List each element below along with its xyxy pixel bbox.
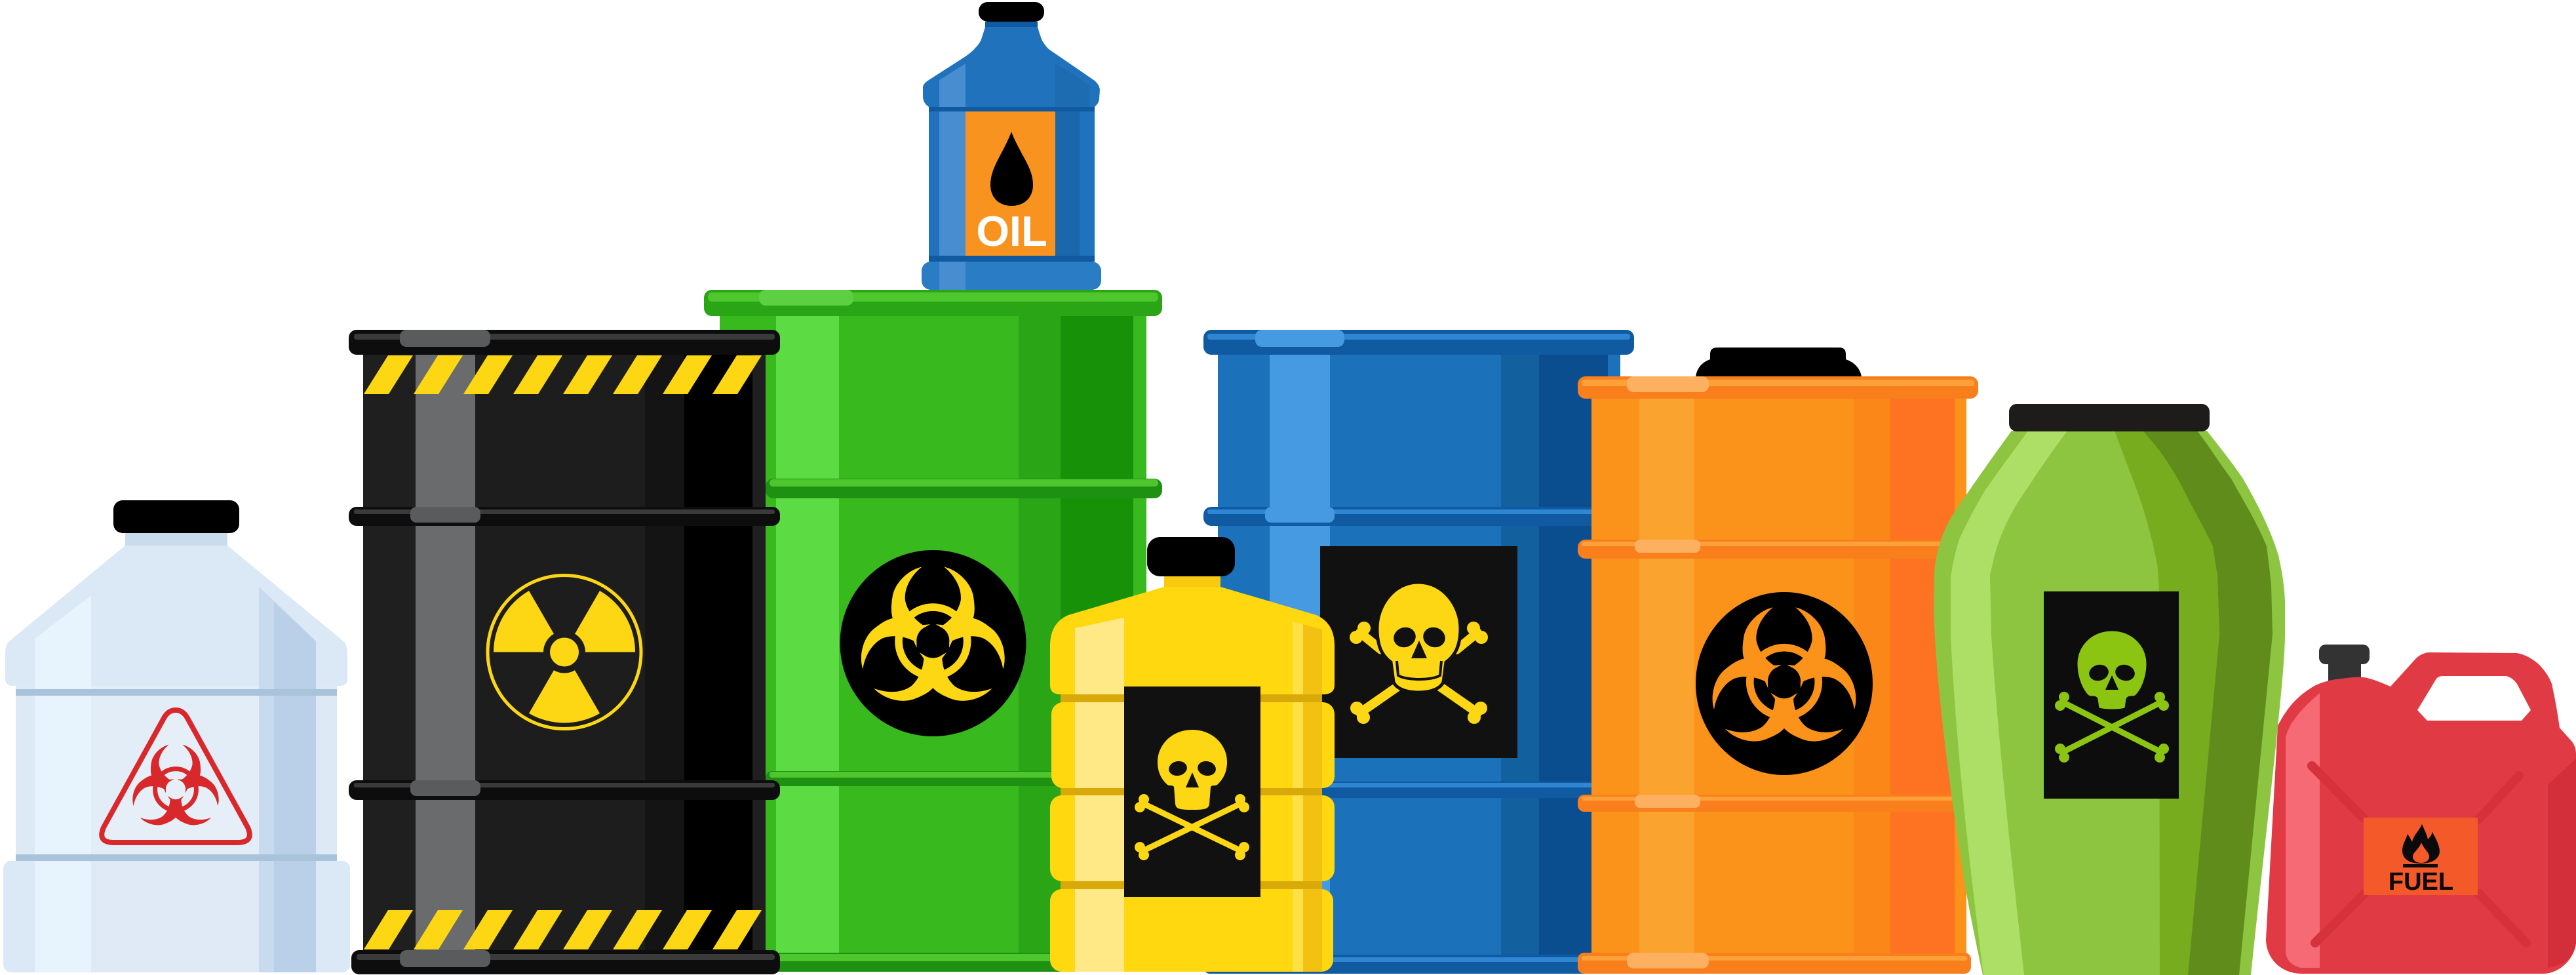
orange barrel shading [1639,399,1955,956]
green barrel shading [776,316,1133,972]
bottle lower base [922,262,1101,290]
orange fuel label [2364,818,2478,895]
jug middle body [16,686,337,861]
fuel can body [2266,652,2576,974]
yellow jug bands [1061,694,1322,889]
bottle strips [1951,431,2273,975]
jug shading [35,587,316,972]
yellow jug cap [1147,537,1235,576]
fuel can ribs [2312,766,2526,943]
orange barrel black cap [1696,348,1862,376]
yellow jug with skull label [1050,537,1335,972]
black barrel body [363,355,766,951]
orange barrel body [1591,399,1966,956]
black skull label [2044,591,2179,799]
bottle bands [929,107,1095,262]
jug cap [113,500,239,533]
icon: oil drop [990,132,1033,206]
icon: yellow skull and crossbones [1135,730,1249,860]
jug bands [16,689,337,861]
bottle cap [979,2,1044,22]
green barrel rims [704,290,1162,972]
yellow jug lobes [1050,694,1335,972]
black barrel shading [416,355,752,951]
yellow jug shoulders [1050,587,1335,694]
blue barrel shading [1270,355,1608,958]
orange barrel with biohazard disc [1578,348,1978,974]
jug shoulders [5,546,347,686]
black barrel rims [349,330,780,974]
fuel can right shade [2548,759,2576,968]
icon: radiation trefoil [488,576,641,729]
jug neck [125,533,227,547]
icon: flame [2402,824,2440,867]
bottle neck band [985,22,1038,27]
bottle green body [1934,431,2285,975]
blue barrel rims [1203,330,1634,974]
yellow jug neck [1164,576,1220,588]
orange oil label [966,111,1055,256]
green barrel body [720,316,1146,972]
bottle shading [939,63,1089,290]
fuel can left highlight [2286,693,2320,968]
icon: orange biohazard on black disc [1696,592,1873,775]
red fuel can [2266,645,2576,974]
black skull label [1320,546,1517,758]
black radioactive barrel [349,330,780,974]
icon: yellow skull and bones [1350,582,1488,724]
label text: FUEL: FUEL [2389,868,2453,896]
bottle body [929,106,1095,262]
green barrel with biohazard disc [704,290,1162,972]
jug lower body [3,861,350,972]
blue barrel with skull label [1203,330,1634,974]
black skull label [1124,686,1260,897]
yellow jug highlights [1075,618,1322,972]
blue oil bottle [922,2,1101,290]
bottom hazard stripes [364,910,762,949]
bottle shoulders [923,27,1100,107]
bottle cap [2009,404,2210,431]
icon: red biohazard triangle [102,710,250,843]
icon: yellow biohazard on black disc [840,550,1026,736]
orange barrel rims [1578,376,1978,974]
white jug with biohazard triangle [3,500,350,972]
icon: green skull and crossbones [2055,630,2169,763]
top hazard stripes [364,355,762,394]
label text: OIL: OIL [976,207,1047,255]
green bottle with skull label [1934,404,2285,975]
blue barrel body [1218,355,1620,958]
fuel can cap [2319,645,2370,682]
